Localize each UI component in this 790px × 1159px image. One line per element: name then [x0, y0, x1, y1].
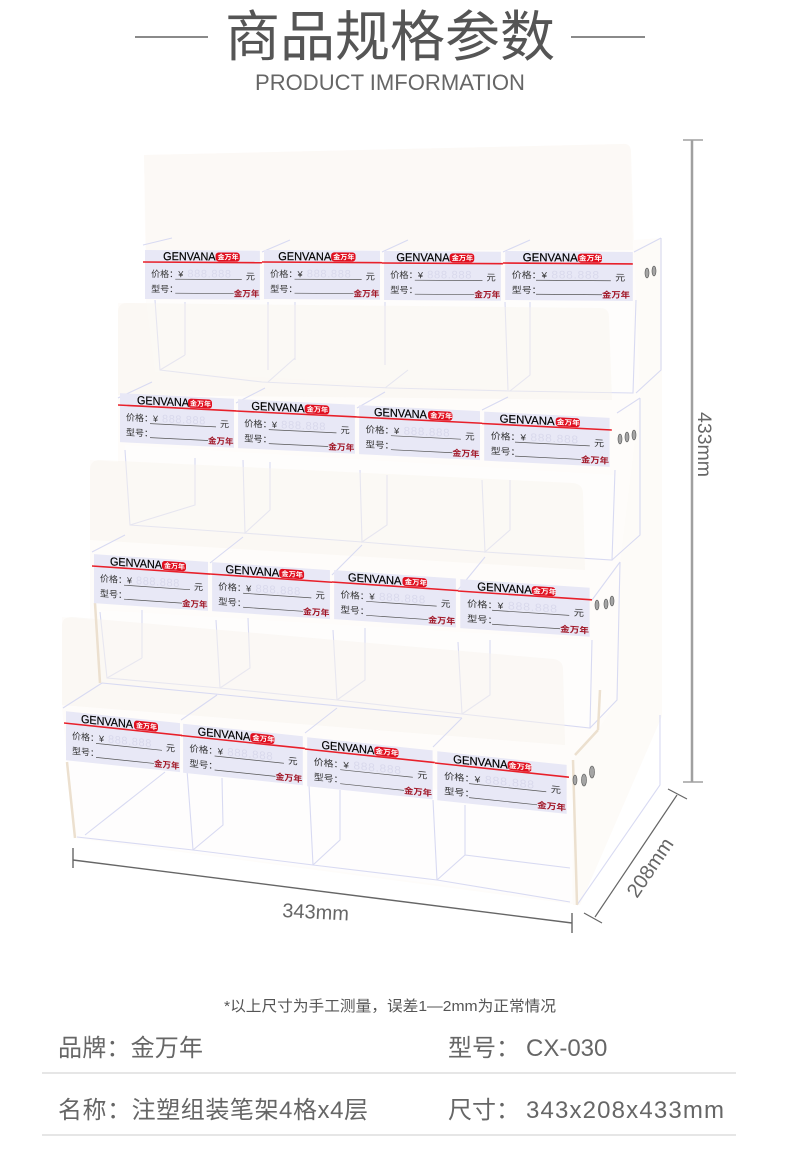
spec: name: 名称：注塑组装笔架4格x4层	[58, 1097, 368, 1124]
tier 4 label 1: 金万年	[154, 758, 180, 771]
tier 2 label 3: 价格：¥	[365, 424, 400, 436]
tier 4 label 2: 元	[288, 756, 298, 767]
product photo: acrylic pen display rack	[62, 144, 662, 905]
tier 2 back plate	[118, 303, 612, 400]
dimension: height 433mm	[683, 140, 715, 782]
dimension: depth 208mm	[584, 789, 687, 923]
tier 4 boxes	[63, 603, 660, 905]
tier 2 label 4: 888.888	[530, 432, 579, 446]
tier 3 back plate	[90, 460, 585, 570]
tier 2 label 1	[118, 393, 236, 448]
tier 3 label 4: 元	[574, 608, 584, 619]
tier 4 label 4: 金万年	[509, 760, 533, 772]
tier 1 label 3: 金万年	[452, 253, 473, 263]
tier 2 label 4	[482, 411, 612, 467]
tier 4 label 2	[181, 723, 305, 785]
tier 2 label 1: 元	[220, 419, 229, 430]
tier 3 label 4: GENVANA	[477, 580, 532, 597]
tier 3 label 3: GENVANA	[348, 570, 401, 588]
back plate top	[144, 144, 633, 250]
tier 2 label 4: 型号：	[491, 446, 520, 458]
tier 1 label 3: 888.888	[427, 269, 472, 281]
right side panels	[573, 238, 662, 905]
tier 3 label 1: GENVANA	[110, 556, 162, 572]
tier 1 label 3: 价格：¥	[390, 269, 424, 280]
tier 4 label 1: 型号：	[72, 746, 99, 759]
dimension: width 343mm	[73, 848, 572, 933]
tier 1 label 4: 金万年	[579, 254, 603, 263]
tier 1 boxes	[143, 238, 661, 393]
tier 2 label 4: 金万年	[581, 454, 609, 466]
tier 1 label 3: 金万年	[474, 289, 501, 300]
tier 1 label 4: 价格：¥	[512, 270, 548, 281]
tier 4 label 3	[305, 737, 435, 800]
tier 3 label 3	[332, 569, 458, 628]
tier 2 label 3: 金万年	[452, 447, 480, 459]
tier 2 label 3: 型号：	[365, 440, 394, 451]
tier 4 label 2: 金万年	[275, 771, 303, 784]
tier 1 label 1	[143, 250, 262, 300]
tier 3 label 3: 元	[441, 599, 451, 609]
tier 4 label 1: 元	[166, 743, 175, 754]
tier 1 label 2: 型号：	[270, 284, 298, 294]
tier 4 label 2: GENVANA	[198, 725, 250, 744]
tier 2 label 2: 888.888	[281, 419, 326, 433]
tier 3 label 2: 型号：	[218, 597, 246, 608]
tier 3 label 2: 888.888	[255, 583, 301, 598]
tier 3 label 1: 元	[194, 582, 203, 593]
tier 1 label 2: 元	[366, 272, 375, 282]
spec: model: 型号：	[448, 1035, 520, 1062]
tier 4 label 4: 金万年	[537, 799, 566, 813]
tier 4 label 4: GENVANA	[453, 753, 508, 772]
tier 2 label 1: 价格：¥	[126, 411, 159, 424]
tier 2 label 3	[357, 404, 482, 460]
tier 3 label 4: 价格：¥	[467, 598, 504, 612]
tier 1 label 1: 元	[246, 272, 255, 282]
spec: size: 尺寸：	[448, 1097, 520, 1124]
tier 3 label 1: 金万年	[164, 561, 185, 571]
tier 3 label 4: 型号：	[467, 613, 498, 626]
tier 2 label 1: 888.888	[162, 413, 206, 427]
tier 1 label 2: 价格：¥	[270, 268, 304, 279]
tier 4 label 3: 888.888	[353, 761, 402, 777]
tier 4 label 3: 价格：¥	[314, 756, 350, 772]
tier 3 label 3: 金万年	[428, 614, 456, 626]
tier 4 back plate	[62, 617, 565, 745]
tier 4 label 1: GENVANA	[81, 714, 133, 731]
tier 4 label 4: 型号：	[444, 786, 475, 800]
tier 2 label 2: 金万年	[328, 441, 355, 453]
tier 1 label 2: 888.888	[307, 268, 351, 281]
tier 2 label 2	[236, 399, 357, 454]
tier 3 label 1: 型号：	[100, 589, 127, 600]
tier 1 label 1: 888.888	[187, 268, 232, 281]
tier 3 label 2: 元	[315, 590, 325, 601]
tier 1 label 4: 金万年	[602, 289, 630, 300]
tier 3 label 2: GENVANA	[226, 563, 279, 580]
tier 1 label 4: 888.888	[551, 270, 600, 282]
tier 1 label 3: 元	[487, 273, 496, 283]
tier 1 label 4: 元	[615, 273, 626, 284]
tier 4 label 3: 元	[417, 770, 428, 782]
tier 3 label 3: 金万年	[405, 577, 427, 587]
tier 1 label 3: 型号：	[390, 285, 418, 295]
tier 1 label 1: 型号：	[151, 284, 178, 294]
tier 3 label 3: 价格：¥	[341, 589, 376, 602]
tier 3 label 2: 价格：¥	[218, 581, 252, 594]
tier 3 label 1: 价格：¥	[100, 573, 133, 586]
tier 1 label 2: 金万年	[354, 288, 380, 299]
tier 2 label 2: 元	[341, 425, 350, 436]
tier 1 label 4: 型号：	[512, 285, 541, 296]
dimension: height 433mm: 433mm	[693, 412, 715, 477]
tier 4 label 2: 价格：¥	[189, 743, 224, 757]
tier 2 label 3: 元	[465, 432, 475, 442]
tier 1 label 2: 金万年	[333, 252, 355, 262]
tier 2 label 2: 型号：	[244, 434, 272, 445]
dimension: width 343mm: 343mm	[282, 900, 350, 925]
tier 4 label 4	[435, 751, 569, 814]
tier 4 label 4: 元	[551, 785, 561, 796]
tier 4 label 3: 金万年	[404, 785, 432, 798]
tier 2 label 4: 价格：¥	[491, 430, 527, 444]
tier 3 label 4: 金万年	[560, 623, 589, 636]
tier 2 label 1: 金万年	[208, 436, 234, 447]
tier 4 label 1: 888.888	[108, 734, 152, 750]
spec: brand: 品牌：金万年	[58, 1035, 203, 1062]
tier 1 label 1: 价格：¥	[151, 268, 184, 279]
tier 2 label 4: 元	[594, 439, 605, 449]
tier 4 label 2: 型号：	[189, 759, 218, 771]
tier 1 label 2	[262, 250, 382, 300]
spec: size: 343x208x433mm	[526, 1097, 724, 1124]
tier 1 label 1: GENVANA	[163, 251, 216, 263]
tier 2 label 1: 金万年	[190, 399, 211, 409]
tier 3 label 4: 888.888	[508, 600, 558, 615]
tier 4 label 3: GENVANA	[322, 738, 375, 757]
tier 1 label 1: 金万年	[218, 252, 239, 262]
tier 2 label 4: GENVANA	[500, 412, 555, 428]
title: 商品规格参数	[225, 6, 555, 68]
tier 3 boxes	[92, 535, 620, 728]
tier 3 label 4: 金万年	[533, 585, 557, 596]
tier 3 label 1: 金万年	[182, 598, 208, 610]
tier 3 label 3: 型号：	[341, 605, 369, 616]
tier 2 boxes	[118, 382, 640, 560]
tier 1 label 4: GENVANA	[523, 251, 579, 264]
spec: model: CX-030	[526, 1035, 607, 1062]
tier 2 label 2: 价格：¥	[244, 418, 278, 430]
tier 2 label 3: 888.888	[404, 426, 450, 440]
tier 4 label 4: 价格：¥	[444, 771, 481, 786]
tier 3 label 2: 金万年	[303, 605, 330, 618]
tier 2 label 2: GENVANA	[251, 400, 305, 415]
rack silhouette	[62, 144, 662, 905]
tier 2 label 3: 金万年	[430, 411, 452, 421]
tier 1 label 3: GENVANA	[396, 251, 450, 264]
tier 1 label 4	[503, 251, 633, 301]
tier 2 label 4: 金万年	[557, 418, 581, 427]
tier 4 label 2: 888.888	[227, 747, 273, 763]
dimension: depth 208mm: 208mm	[623, 834, 678, 902]
tier 3 label 2	[210, 562, 332, 619]
measurement disclaimer: *以上尺寸为手工测量，误差1—2mm为正常情况	[224, 998, 556, 1015]
tier 1 label 3	[382, 251, 503, 301]
tier 4 label 3: 金万年	[375, 747, 399, 758]
tier 4 label 3: 型号：	[314, 772, 343, 786]
tier 1 label 1: 金万年	[234, 289, 260, 299]
tier 1 label 2: GENVANA	[278, 251, 331, 263]
tier 2 label 1: 型号：	[126, 427, 153, 439]
tier 2 label 2: 金万年	[307, 405, 328, 414]
subtitle: PRODUCT IMFORMATION	[255, 70, 525, 95]
tier 2 label 3: GENVANA	[374, 405, 427, 421]
tier 4 label 1: 金万年	[136, 721, 157, 732]
tier 4 label 1	[64, 711, 182, 772]
tier 3 label 4	[458, 579, 592, 637]
tier 4 label 4: 888.888	[485, 773, 535, 791]
tier 4 label 1: 价格：¥	[72, 730, 105, 744]
tier 4 label 2: 金万年	[252, 733, 274, 744]
tier 3 label 1	[92, 554, 210, 611]
tier 3 label 2: 金万年	[281, 569, 303, 579]
tier 3 label 1: 888.888	[136, 575, 180, 590]
tier 3 label 3: 888.888	[379, 592, 426, 606]
tier 2 label 1: GENVANA	[137, 395, 189, 410]
metal snap fasteners	[573, 266, 656, 786]
